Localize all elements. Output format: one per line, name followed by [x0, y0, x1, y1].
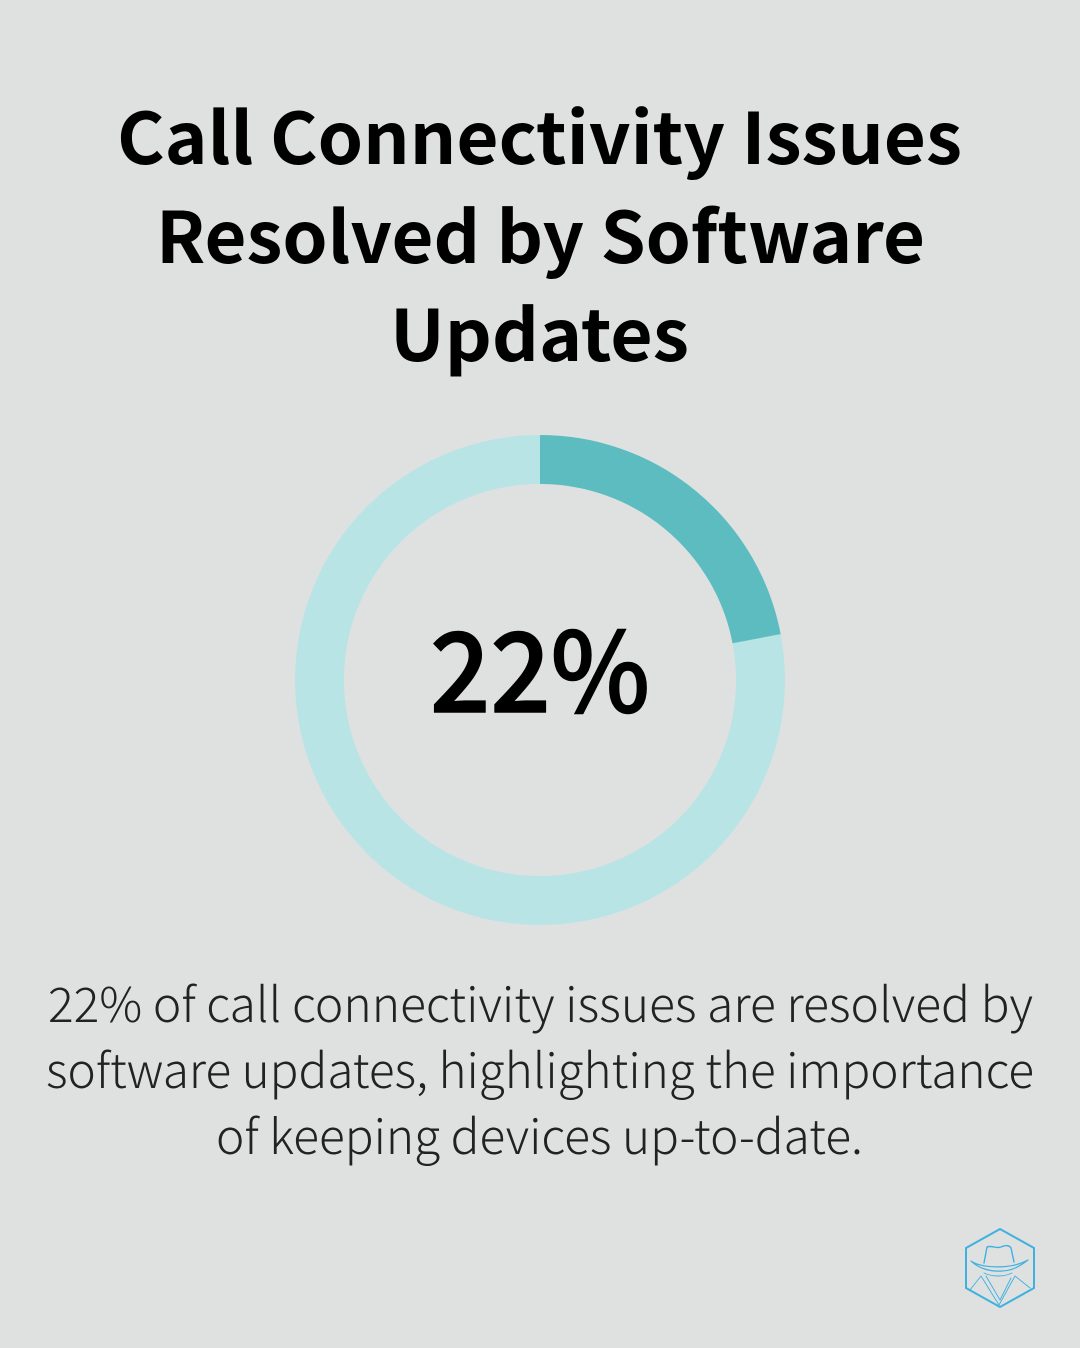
donut chart: 22% — [320, 460, 760, 900]
title: Resolved by Software — [156, 182, 925, 284]
title — [117, 83, 962, 382]
donut value: 22% — [430, 584, 650, 744]
description text: of keeping devices up-to-date. — [216, 1098, 863, 1168]
description text: 22% of call connectivity issues are resolved by — [48, 966, 1033, 1036]
title: Call Connectivity Issues — [117, 83, 962, 185]
description text — [46, 966, 1034, 1168]
description text: software updates, highlighting the importance — [46, 1032, 1034, 1102]
title: Updates — [390, 280, 689, 382]
icon: logo hexagon with spy in hat — [966, 1229, 1034, 1307]
